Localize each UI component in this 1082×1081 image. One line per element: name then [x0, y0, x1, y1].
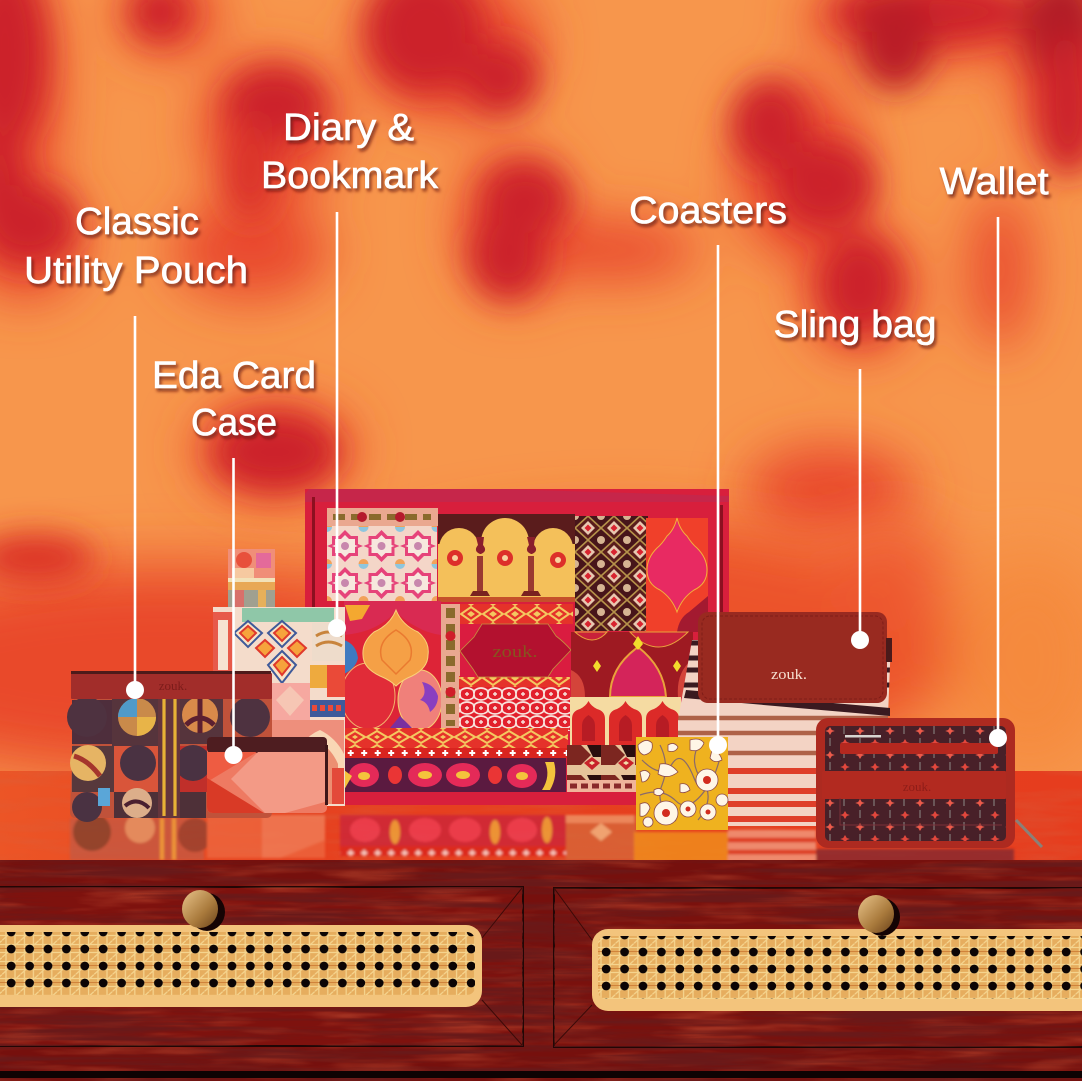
callout: Classic Utility Pouch: Classic — [75, 201, 199, 243]
callout: Diary & Bookmark: Bookmark — [261, 155, 439, 197]
reflections on the table — [70, 813, 1014, 864]
eda card case — [207, 737, 328, 813]
diary — [213, 607, 345, 806]
callout: Sling bag — [774, 304, 936, 649]
callout: Wallet: Wallet — [940, 161, 1049, 203]
box panel: yellow arches — [438, 514, 575, 602]
wallet: zouk. — [903, 779, 931, 794]
coasters — [636, 737, 728, 830]
box panel: tile — [327, 526, 437, 601]
left knob — [182, 890, 225, 931]
box panel: red and white — [459, 687, 570, 731]
box panel: paisley — [571, 632, 693, 697]
gift box — [305, 489, 729, 805]
left drawer — [0, 887, 523, 1046]
box panel: large quatrefoil — [341, 601, 442, 730]
box panel: bottom borders — [343, 728, 568, 792]
cabinet — [0, 860, 1082, 1081]
right knob — [858, 895, 900, 936]
callout: Eda Card Case: Eda Card — [152, 355, 316, 397]
box panel: geometric — [567, 745, 636, 792]
wallet — [816, 718, 1042, 848]
box label with zouk plaque: zouk. — [492, 642, 538, 661]
sling bag: zouk. — [771, 667, 807, 683]
callout: Diary & Bookmark — [261, 107, 439, 637]
callout: Eda Card Case: Case — [191, 402, 277, 444]
background: blurred wall — [0, 0, 1082, 780]
sling bag — [678, 612, 892, 826]
callout: Coasters — [629, 190, 787, 754]
right drawer — [554, 888, 1082, 1047]
box panel: tile border — [327, 508, 438, 526]
bookmark — [228, 549, 275, 607]
box panel: ogee — [646, 518, 708, 632]
callout: Sling bag: Sling bag — [774, 304, 936, 346]
box panel: diamonds — [575, 516, 648, 631]
callout: Coasters: Coasters — [629, 190, 787, 232]
callout: Diary & Bookmark: Diary & — [283, 107, 414, 149]
callout: Wallet — [940, 161, 1049, 747]
right cane panel — [592, 929, 1082, 1011]
callout: Classic Utility Pouch: Utility Pouch — [24, 250, 248, 292]
callout: Classic Utility Pouch — [24, 201, 248, 699]
box panel: vertical border — [441, 604, 460, 729]
callout: Eda Card Case — [152, 355, 316, 764]
left cane panel — [0, 925, 482, 1007]
box panel: arches row — [570, 697, 681, 745]
box panel: lattice strips — [459, 604, 573, 687]
table top — [0, 771, 1082, 864]
classic utility pouch: zouk. — [159, 678, 187, 693]
classic utility pouch — [67, 671, 272, 822]
box label with zouk plaque — [460, 624, 571, 677]
